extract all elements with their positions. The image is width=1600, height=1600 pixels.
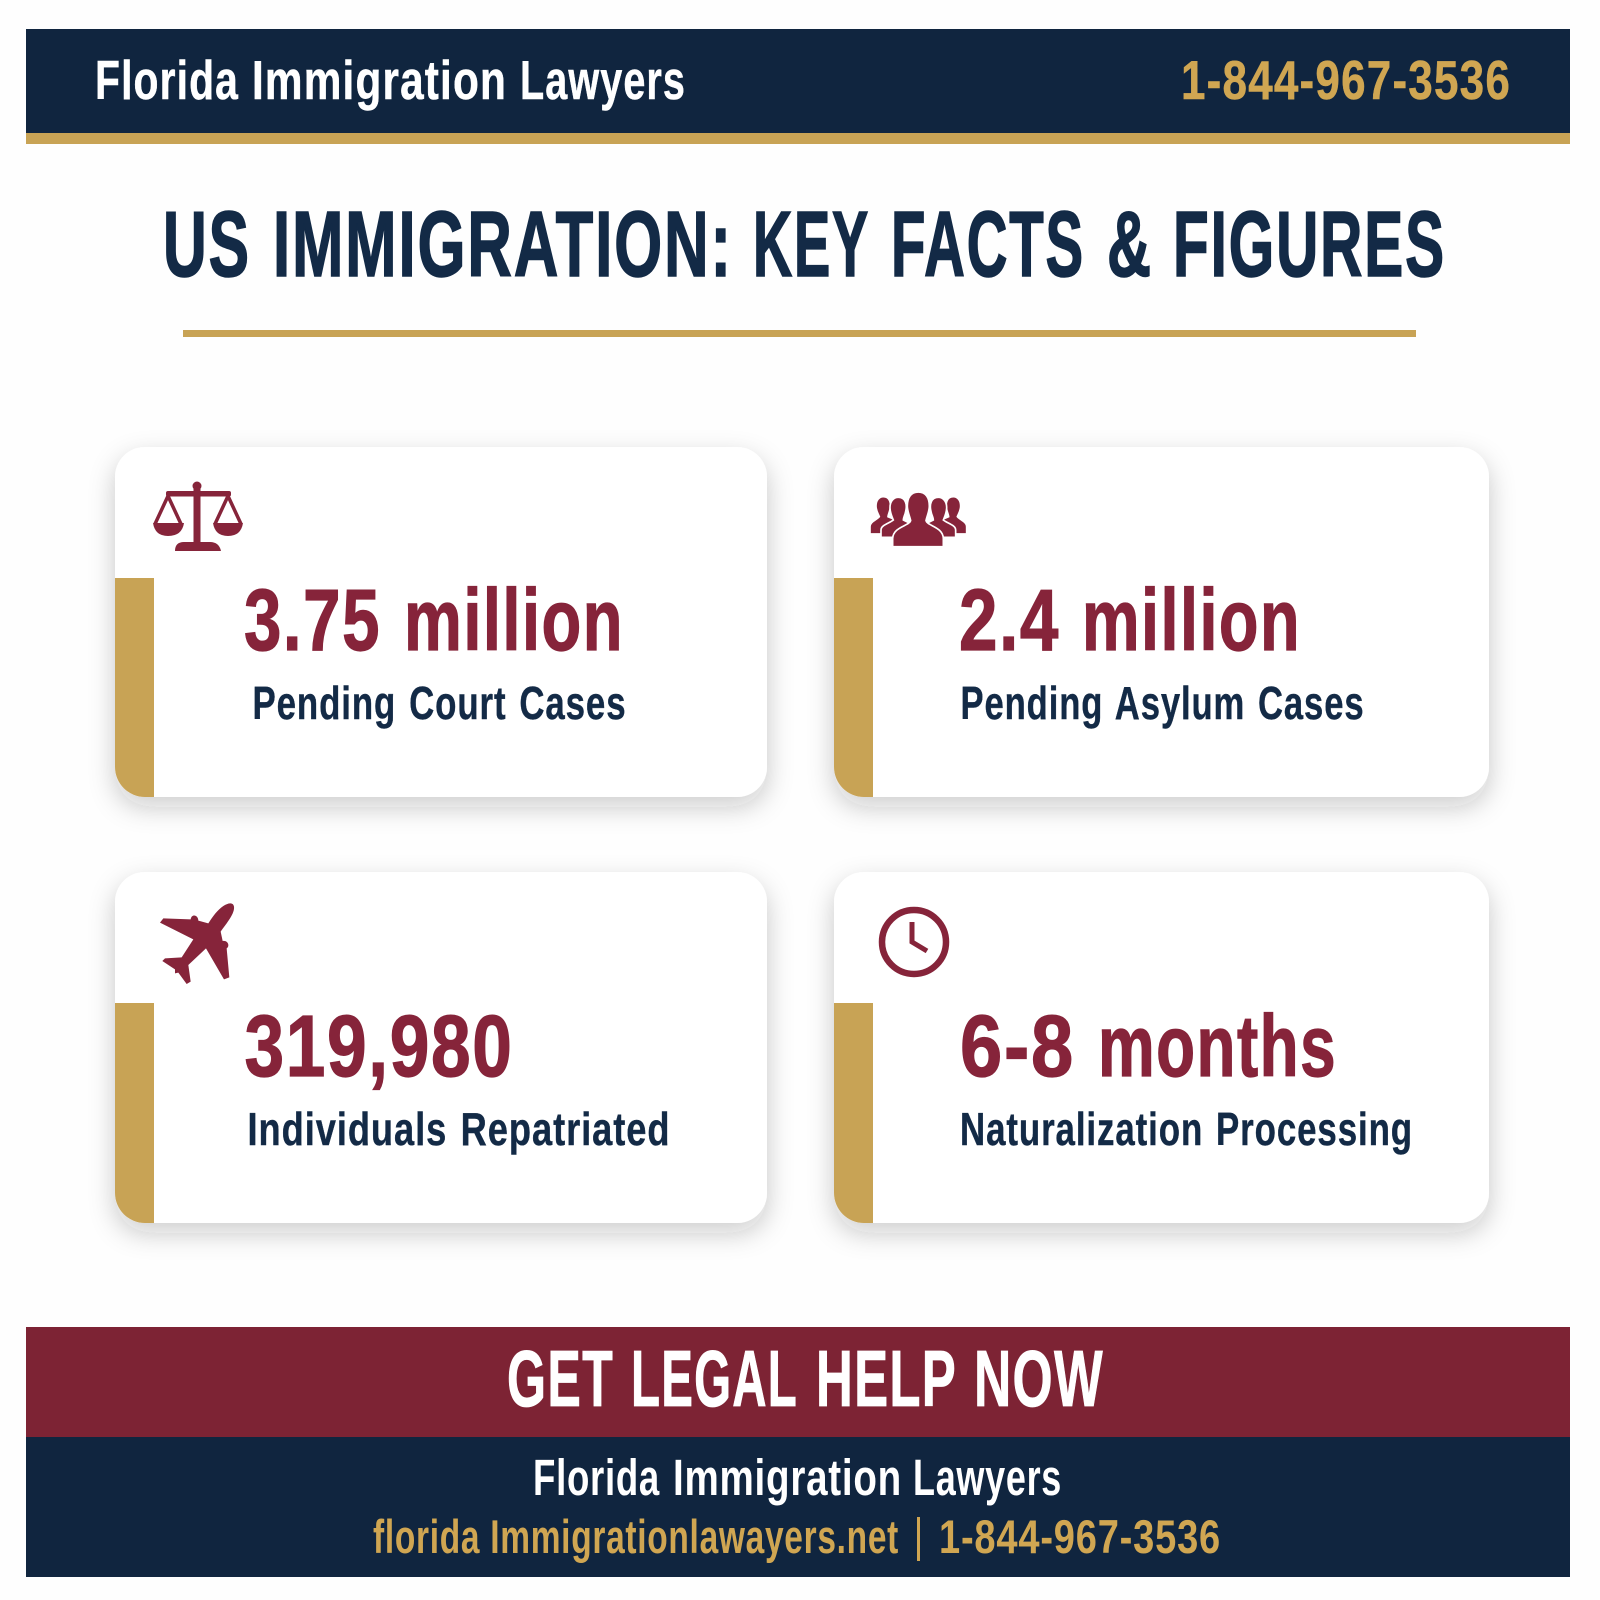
icon: airplane [160, 903, 234, 984]
header firm name: Immigration [252, 49, 507, 111]
call to action text: GET [507, 1334, 614, 1423]
title: & [1107, 192, 1153, 296]
footer firm name [533, 1449, 1062, 1506]
header firm name [95, 49, 686, 111]
label: pending asylum cases: Pending Asylum Cases [960, 677, 1364, 729]
stat: 319,980: 319,980 [244, 998, 514, 1095]
panel: individuals repatriated [115, 872, 767, 1223]
stat: 2.4 million [959, 572, 1301, 669]
title: KEY [753, 192, 870, 296]
icon: clock [882, 910, 946, 974]
title: FIGURES [1173, 192, 1446, 296]
stat: 3.75 million [244, 572, 624, 669]
icon: scales of justice [153, 482, 243, 551]
title: IMMIGRATION: [273, 192, 733, 296]
panel: naturalization processing [834, 872, 1489, 1223]
call to action text: LEGAL [631, 1334, 798, 1423]
footer firm name: Lawyers [913, 1449, 1062, 1506]
header phone number: 1-844-967-3536 [1181, 49, 1511, 111]
label: pending court cases: Pending Court Cases [252, 677, 626, 729]
icon: group of people [870, 492, 967, 547]
footer phone number: 1-844-967-3536 [939, 1510, 1221, 1563]
stat: 6-8 months: 6-8 [960, 998, 1075, 1095]
panel: pending court cases [115, 447, 767, 797]
stat: 6-8 months: months [1098, 998, 1337, 1095]
stat: 6-8 months [960, 998, 1337, 1095]
header firm name: Lawyers [520, 49, 686, 111]
call to action banner [26, 1327, 1570, 1437]
footer website: florida Immigrationlawayers.net [373, 1510, 899, 1563]
stat: 3.75 million: 3.75 [244, 572, 381, 669]
footer firm name: Florida [533, 1449, 660, 1506]
title: FACTS [891, 192, 1085, 296]
footer contact bar [26, 1437, 1570, 1577]
label: individuals repatriated: Individuals Repatriated [248, 1103, 670, 1155]
stat: 2.4 million: million [1082, 572, 1301, 669]
stat: 3.75 million: million [404, 572, 624, 669]
call to action text: NOW [974, 1334, 1104, 1423]
footer firm name: Immigration [673, 1449, 902, 1506]
header firm name: Florida [95, 49, 239, 111]
call to action text [507, 1334, 1104, 1423]
label: naturalization processing: Naturalization Processing [960, 1103, 1413, 1155]
title [163, 192, 1446, 296]
header bar [26, 29, 1570, 144]
title: US [163, 192, 251, 296]
call to action text: HELP [816, 1334, 957, 1423]
panel: pending asylum cases [834, 447, 1489, 797]
stat: 2.4 million: 2.4 [959, 572, 1060, 669]
